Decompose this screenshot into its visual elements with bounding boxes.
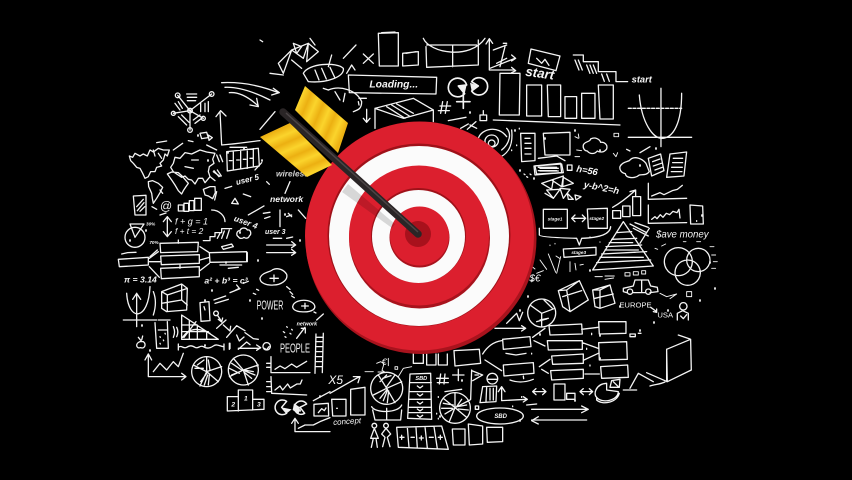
stairs with hatch	[573, 55, 628, 82]
SBD oval	[477, 408, 523, 424]
scattered dots around doodles	[130, 112, 715, 421]
formulas: f + g = 1	[175, 217, 208, 227]
centre red extrusion	[390, 208, 450, 268]
concept bars	[330, 377, 365, 427]
user 5 label: user 5	[235, 172, 261, 187]
lower fletching	[260, 123, 332, 177]
formulas: f + t = 2	[175, 226, 204, 236]
arrow shadow on target	[342, 184, 395, 228]
inner white ring	[372, 190, 465, 283]
misc ticks and arrows	[152, 163, 306, 255]
stage boxes	[539, 208, 611, 257]
start label right: start	[632, 74, 653, 84]
pyramid diagram	[593, 222, 653, 270]
ticks around pie	[437, 397, 479, 419]
pi formula: π = 3.14	[124, 275, 157, 285]
phone icon	[690, 205, 703, 224]
target board	[305, 122, 536, 354]
podium with rank numbers: 1	[244, 396, 248, 403]
apple	[137, 336, 145, 348]
cross and strokes	[328, 45, 373, 73]
flag	[471, 370, 483, 399]
small monitor	[313, 392, 330, 416]
centre bullseye	[390, 206, 449, 266]
small labels near pie	[365, 358, 412, 377]
hash and plus	[437, 369, 464, 392]
hash sign and ticks	[323, 88, 477, 129]
triangle diagram	[182, 315, 218, 339]
SBD table: SBD	[415, 376, 427, 382]
target extrusion shadow	[306, 123, 536, 354]
zigzag chart	[145, 353, 186, 380]
doodles: right cluster	[524, 164, 717, 327]
cloud with cross	[253, 269, 294, 298]
flow chart right column	[599, 322, 641, 378]
cube	[162, 284, 187, 312]
start label bold: start	[525, 64, 556, 83]
outer red ring	[305, 122, 534, 350]
network label: network	[270, 194, 304, 204]
arrow zigzag trail	[214, 311, 270, 350]
formulas	[163, 210, 225, 237]
equation: a² + b³ = c³	[204, 275, 249, 285]
arrow impact hole	[405, 221, 431, 247]
EUROPE label: EUROPE	[619, 300, 652, 309]
table with plus signs	[227, 147, 259, 171]
3D pie chart	[595, 379, 620, 403]
pie chart with percents: 70%	[149, 240, 160, 245]
doodles: top centre cluster	[323, 32, 692, 178]
small square and dots	[480, 111, 519, 151]
podium with rank numbers	[227, 390, 264, 411]
user 4 label: user 4	[233, 213, 259, 231]
venn diagram	[664, 248, 710, 285]
large bar chart	[493, 73, 620, 125]
shaft highlight	[286, 113, 418, 232]
pacman circles	[275, 400, 307, 415]
people icons	[371, 423, 391, 447]
leaf shape	[328, 88, 362, 112]
booklet	[480, 386, 497, 403]
hatched ellipse	[303, 64, 343, 82]
formula label: y-b^2=h	[582, 179, 620, 196]
car	[623, 280, 658, 293]
pie chart with percents: 30%	[146, 221, 156, 226]
top arrow	[495, 312, 526, 331]
flow chart boxes	[118, 252, 247, 279]
arrow	[260, 86, 418, 234]
SBD table	[408, 373, 432, 419]
bowl chart	[423, 38, 485, 67]
doodles: bottom centre cluster	[327, 312, 691, 449]
parabola plot	[123, 287, 157, 327]
double arrows and box pair	[533, 384, 593, 400]
large pie chart	[440, 393, 470, 423]
user 3 label: user 3	[265, 229, 286, 236]
flow chart middle column	[533, 324, 599, 380]
flow box top	[122, 240, 233, 257]
small boxes beneath target	[413, 353, 447, 365]
arrow shaft	[283, 112, 418, 234]
stairs sketch	[203, 229, 232, 241]
tall box sketch	[378, 32, 418, 66]
hatched pie chart	[371, 372, 403, 404]
loading bar	[348, 75, 437, 94]
second red ring	[349, 166, 489, 306]
rising bars with arrow	[613, 190, 641, 218]
arrow growth chart	[486, 39, 516, 73]
stage boxes: stage1	[548, 217, 563, 222]
icon: network nodes	[171, 92, 214, 132]
documents and cloud	[620, 147, 687, 178]
X5 label: X5	[327, 373, 343, 387]
cloud	[237, 228, 251, 238]
concept bars: concept	[333, 416, 362, 427]
person icon and arrow	[651, 303, 688, 320]
currency sketch: $€	[528, 274, 541, 285]
save money label: $ave money	[655, 229, 710, 240]
monitor and keyboard	[534, 132, 572, 175]
podium with rank numbers: 3	[257, 402, 261, 409]
line chart one	[267, 357, 310, 373]
house box sketch	[375, 98, 433, 128]
SBD oval: SBD	[494, 414, 508, 420]
upper fletching	[295, 86, 348, 153]
network arrow: network	[297, 321, 318, 327]
loading bar: Loading...	[369, 79, 418, 90]
triangle diagram	[260, 38, 318, 75]
bowl sketch	[372, 405, 402, 420]
line chart two	[267, 377, 307, 395]
small circle gauge	[487, 373, 498, 384]
outer ring inner shadow	[328, 144, 510, 326]
cylinder and arrow path	[200, 281, 248, 321]
document	[521, 133, 535, 162]
at sign: @	[160, 199, 172, 213]
battery icon	[528, 49, 560, 71]
long double arrows	[532, 406, 588, 424]
h=56 label: h=56	[576, 164, 599, 178]
keyboard label box	[524, 164, 563, 177]
cubes	[558, 281, 615, 312]
ladder chart	[314, 312, 323, 373]
pie chart with percents	[125, 221, 160, 247]
PEOPLE label: PEOPLE	[280, 342, 310, 356]
scattered dots and strokes	[530, 237, 717, 299]
L shaped arrow	[157, 111, 275, 150]
stage boxes: stage3	[571, 250, 586, 255]
inner ring shadow	[371, 188, 466, 283]
tablet icon	[133, 195, 146, 215]
podium with rank numbers: 2	[230, 402, 235, 409]
concentric sketch	[478, 128, 512, 158]
world map	[129, 148, 223, 203]
gender pacman icon	[448, 78, 488, 108]
pie chart partial	[528, 299, 556, 327]
L arrow	[498, 387, 537, 407]
POWER label: POWER	[257, 298, 283, 312]
three boxes	[452, 424, 503, 445]
second red ring extrusion	[349, 168, 490, 308]
cloud medium	[583, 138, 607, 154]
zigzag lines	[623, 373, 665, 390]
USA label: USA	[657, 310, 674, 319]
doodles: lower left cluster	[118, 252, 330, 432]
oval with cross	[293, 300, 315, 312]
cube box right	[647, 335, 691, 382]
beaker	[155, 320, 178, 348]
pie chart hatch 2	[228, 355, 258, 385]
small bar chart	[178, 198, 201, 211]
parabola chart right	[628, 88, 692, 147]
wavy line with bars	[178, 343, 229, 350]
flow chart left column	[454, 337, 534, 382]
currency mark: €	[382, 357, 388, 367]
outer white ring	[329, 146, 509, 326]
doodles: top left triangle motif	[260, 38, 362, 112]
plus minus table	[397, 426, 448, 449]
wireless label: wireless	[276, 169, 309, 179]
stage boxes: stage2	[589, 216, 604, 221]
doodles: upper left cluster	[122, 83, 309, 257]
network arrow	[283, 321, 318, 338]
pie chart hatch 1	[192, 357, 222, 387]
small growth chart	[292, 418, 330, 432]
triangle pattern	[542, 176, 581, 200]
line chart panels	[648, 183, 687, 223]
sketched curved arrows	[222, 83, 279, 107]
